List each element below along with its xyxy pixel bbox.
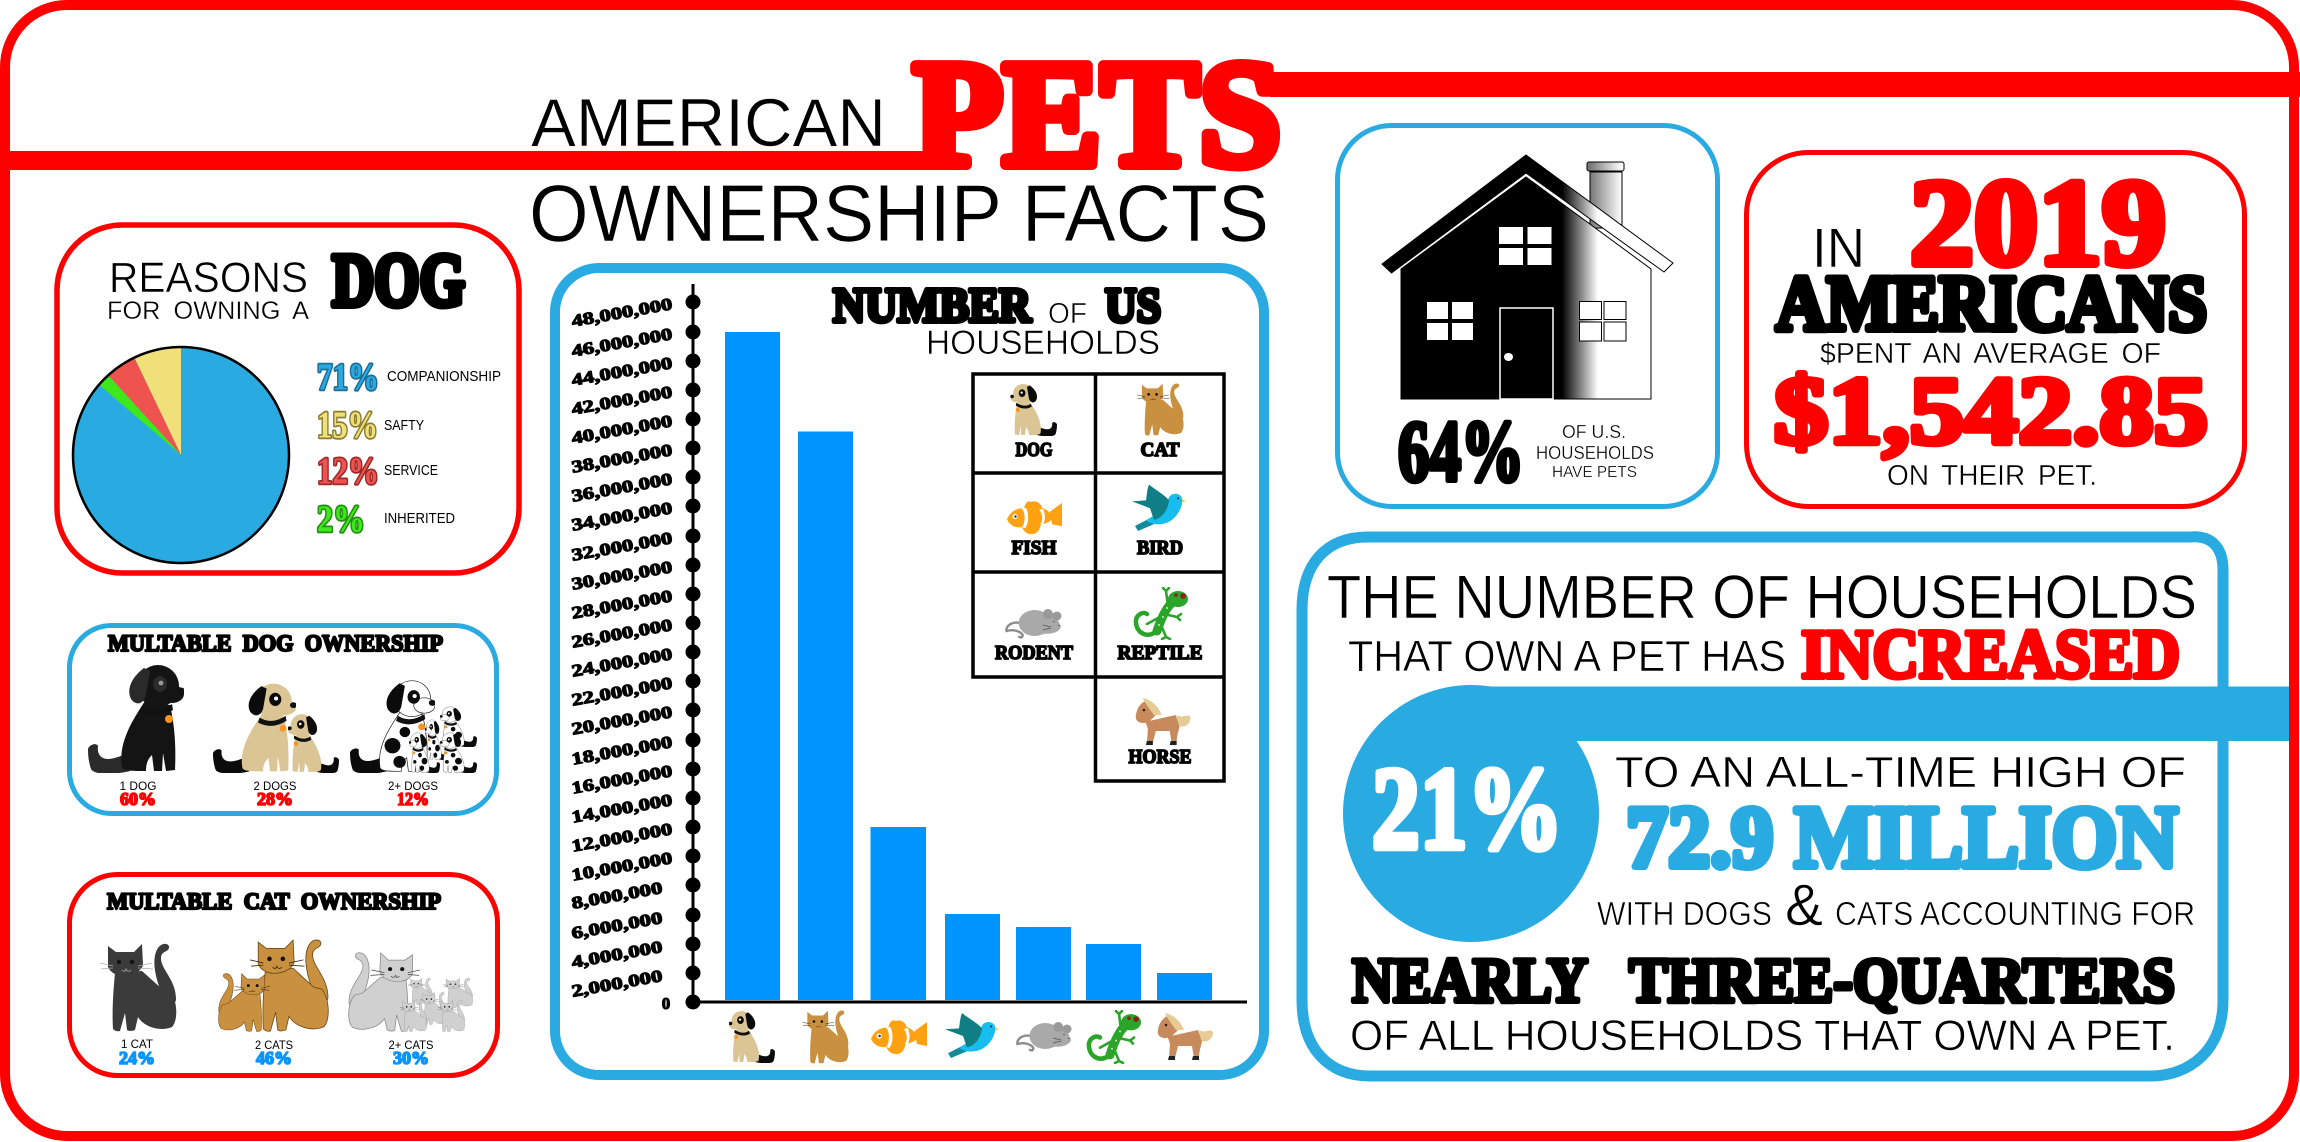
panel: multiple cat ownership xyxy=(70,874,498,1076)
y axis labels: 26,000,000 xyxy=(570,615,674,652)
headline: THAT OWN A PET HAS xyxy=(1348,632,1786,681)
y axis labels: 24,000,000 xyxy=(570,644,674,681)
nearly three-quarters: NEARLY xyxy=(1352,946,1588,1016)
pie chart xyxy=(73,347,289,563)
y axis labels: 16,000,000 xyxy=(570,761,674,798)
households caption: HOUSEHOLDS xyxy=(1536,443,1654,463)
panel heading: DOG xyxy=(332,240,465,322)
pie legend xyxy=(317,356,501,540)
all-time high xyxy=(1615,748,2186,886)
y axis labels: 46,000,000 xyxy=(570,324,674,361)
cat labels: 2+ CATS xyxy=(388,1038,434,1052)
heading: MULTABLE DOG OWNERSHIP xyxy=(108,631,443,656)
y axis labels: 14,000,000 xyxy=(570,790,674,827)
in 2019 xyxy=(1812,154,2166,291)
y axis labels: 38,000,000 xyxy=(570,440,674,477)
pie legend: INHERITED xyxy=(384,511,455,527)
dogs and cats line xyxy=(1597,873,2195,938)
chart heading: HOUSEHOLDS xyxy=(926,324,1160,362)
y axis labels: 12,000,000 xyxy=(570,819,674,856)
panel: 2019 spending xyxy=(1746,152,2244,506)
dog labels xyxy=(120,779,438,809)
all-time high: TO AN ALL-TIME HIGH OF xyxy=(1615,748,2186,797)
dogs and cats line: WITH DOGS xyxy=(1597,895,1772,932)
y axis labels: 34,000,000 xyxy=(570,498,674,535)
y axis labels: 2,000,000 xyxy=(570,966,664,1001)
dog labels: 12% xyxy=(397,789,429,809)
y axis line and dots xyxy=(686,284,700,1010)
pie legend: 2% xyxy=(317,498,365,540)
legend labels: FISH xyxy=(1012,537,1057,559)
dog labels: 2 DOGS xyxy=(254,779,296,793)
dog labels: 28% xyxy=(257,789,293,809)
cat labels: 1 CAT xyxy=(121,1037,154,1051)
title: AMERICAN xyxy=(531,85,886,161)
cat labels: 30% xyxy=(393,1048,429,1068)
households caption: OF U.S. xyxy=(1562,422,1626,442)
title: OWNERSHIP FACTS xyxy=(529,169,1269,259)
blue banner and circle xyxy=(1343,685,2289,942)
legend labels: BIRD xyxy=(1137,537,1183,559)
pie legend: COMPANIONSHIP xyxy=(387,369,501,385)
spent an average of: $PENT AN AVERAGE OF xyxy=(1820,338,2161,370)
panel: multiple dog ownership xyxy=(70,626,496,814)
title: PETS xyxy=(913,30,1281,198)
icon: one dark cat xyxy=(100,944,176,1031)
y axis labels: 48,000,000 xyxy=(570,294,674,331)
chart heading: US xyxy=(1105,278,1161,332)
y axis labels: 8,000,000 xyxy=(570,878,664,913)
y axis labels: 30,000,000 xyxy=(570,557,674,594)
chart heading: OF xyxy=(1048,298,1087,330)
icon: grey cat family xyxy=(349,953,473,1032)
chart heading xyxy=(833,278,1161,362)
y axis labels: 0 xyxy=(662,994,670,1013)
y axis labels: 18,000,000 xyxy=(570,732,674,769)
closing line: OF ALL HOUSEHOLDS THAT OWN A PET. xyxy=(1350,1012,2175,1060)
households caption: HAVE PETS xyxy=(1552,464,1637,481)
legend icons xyxy=(1006,384,1190,745)
cat labels: 24% xyxy=(119,1048,155,1068)
21% stat: 21% xyxy=(1372,743,1563,874)
in 2019: IN xyxy=(1812,216,1865,279)
right red header bar xyxy=(1270,72,2300,97)
panel: number of US households chart xyxy=(555,268,1264,1075)
dogs and cats line: & xyxy=(1785,873,1823,938)
legend labels xyxy=(995,439,1202,768)
pie legend: 12% xyxy=(317,450,379,492)
headline: THE NUMBER OF HOUSEHOLDS xyxy=(1327,563,2197,631)
headline: INCREASED xyxy=(1801,616,2180,694)
heading: MULTABLE CAT OWNERSHIP xyxy=(107,889,441,914)
y axis labels xyxy=(570,294,674,1013)
pie legend: SAFTY xyxy=(384,418,424,434)
legend labels: HORSE xyxy=(1128,746,1192,768)
icon: dalmatian family xyxy=(350,681,477,774)
on their pet: ON THEIR PET. xyxy=(1887,460,2097,492)
all-time high: 72.9 MILLION xyxy=(1626,790,2178,886)
y axis labels: 42,000,000 xyxy=(570,382,674,419)
legend labels: DOG xyxy=(1016,439,1053,461)
x axis line xyxy=(693,1000,1247,1004)
dogs and cats line: CATS ACCOUNTING FOR xyxy=(1835,895,2195,932)
legend labels: CAT xyxy=(1140,439,1180,461)
legend labels: REPTILE xyxy=(1118,642,1202,664)
y axis labels: 6,000,000 xyxy=(570,908,664,943)
icon: house xyxy=(1382,155,1673,399)
panel heading: REASONS xyxy=(109,254,308,302)
y axis labels: 32,000,000 xyxy=(570,528,674,565)
icon: two tan dogs xyxy=(213,684,339,774)
bar chart xyxy=(725,332,1212,1000)
left red header bar xyxy=(0,151,953,170)
y axis labels: 40,000,000 xyxy=(570,411,674,448)
panel heading xyxy=(107,240,465,325)
cat labels: 46% xyxy=(256,1048,292,1068)
y axis labels: 20,000,000 xyxy=(570,702,674,739)
headline xyxy=(1327,563,2197,694)
cat labels xyxy=(119,1037,434,1068)
y axis labels: 22,000,000 xyxy=(570,673,674,710)
pet legend grid xyxy=(973,374,1224,781)
y axis labels: 28,000,000 xyxy=(570,586,674,623)
x axis animal icons xyxy=(729,1011,1213,1064)
panel: households increased xyxy=(1302,537,2289,1076)
pie legend: 15% xyxy=(317,404,378,446)
title xyxy=(529,30,1281,259)
pie legend: 71% xyxy=(317,356,379,398)
y axis labels: 44,000,000 xyxy=(570,353,674,390)
in 2019: 2019 xyxy=(1910,154,2166,291)
icon: one black dog xyxy=(88,665,185,774)
panel: 64% of households xyxy=(1338,126,1718,506)
y axis labels: 36,000,000 xyxy=(570,469,674,506)
icon: two orange cats xyxy=(218,940,328,1032)
panel: reasons for owning a dog xyxy=(57,225,519,573)
y axis labels: 10,000,000 xyxy=(570,848,674,885)
dog labels: 1 DOG xyxy=(120,779,156,793)
dog labels: 2+ DOGS xyxy=(388,779,438,793)
panel heading: FOR OWNING A xyxy=(107,297,309,325)
households caption xyxy=(1536,422,1654,481)
y axis labels: 4,000,000 xyxy=(570,937,664,972)
chart heading: NUMBER xyxy=(833,278,1032,332)
64% stat: 64% xyxy=(1398,402,1524,500)
dollar amount: $1,542.85 xyxy=(1774,357,2208,464)
americans: AMERICANS xyxy=(1776,260,2207,346)
legend labels: RODENT xyxy=(995,642,1074,664)
nearly three-quarters xyxy=(1352,946,2175,1016)
nearly three-quarters: THREE-QUARTERS xyxy=(1629,946,2175,1016)
dog labels: 60% xyxy=(120,789,156,809)
cat labels: 2 CATS xyxy=(255,1038,293,1052)
pie legend: SERVICE xyxy=(384,463,438,479)
